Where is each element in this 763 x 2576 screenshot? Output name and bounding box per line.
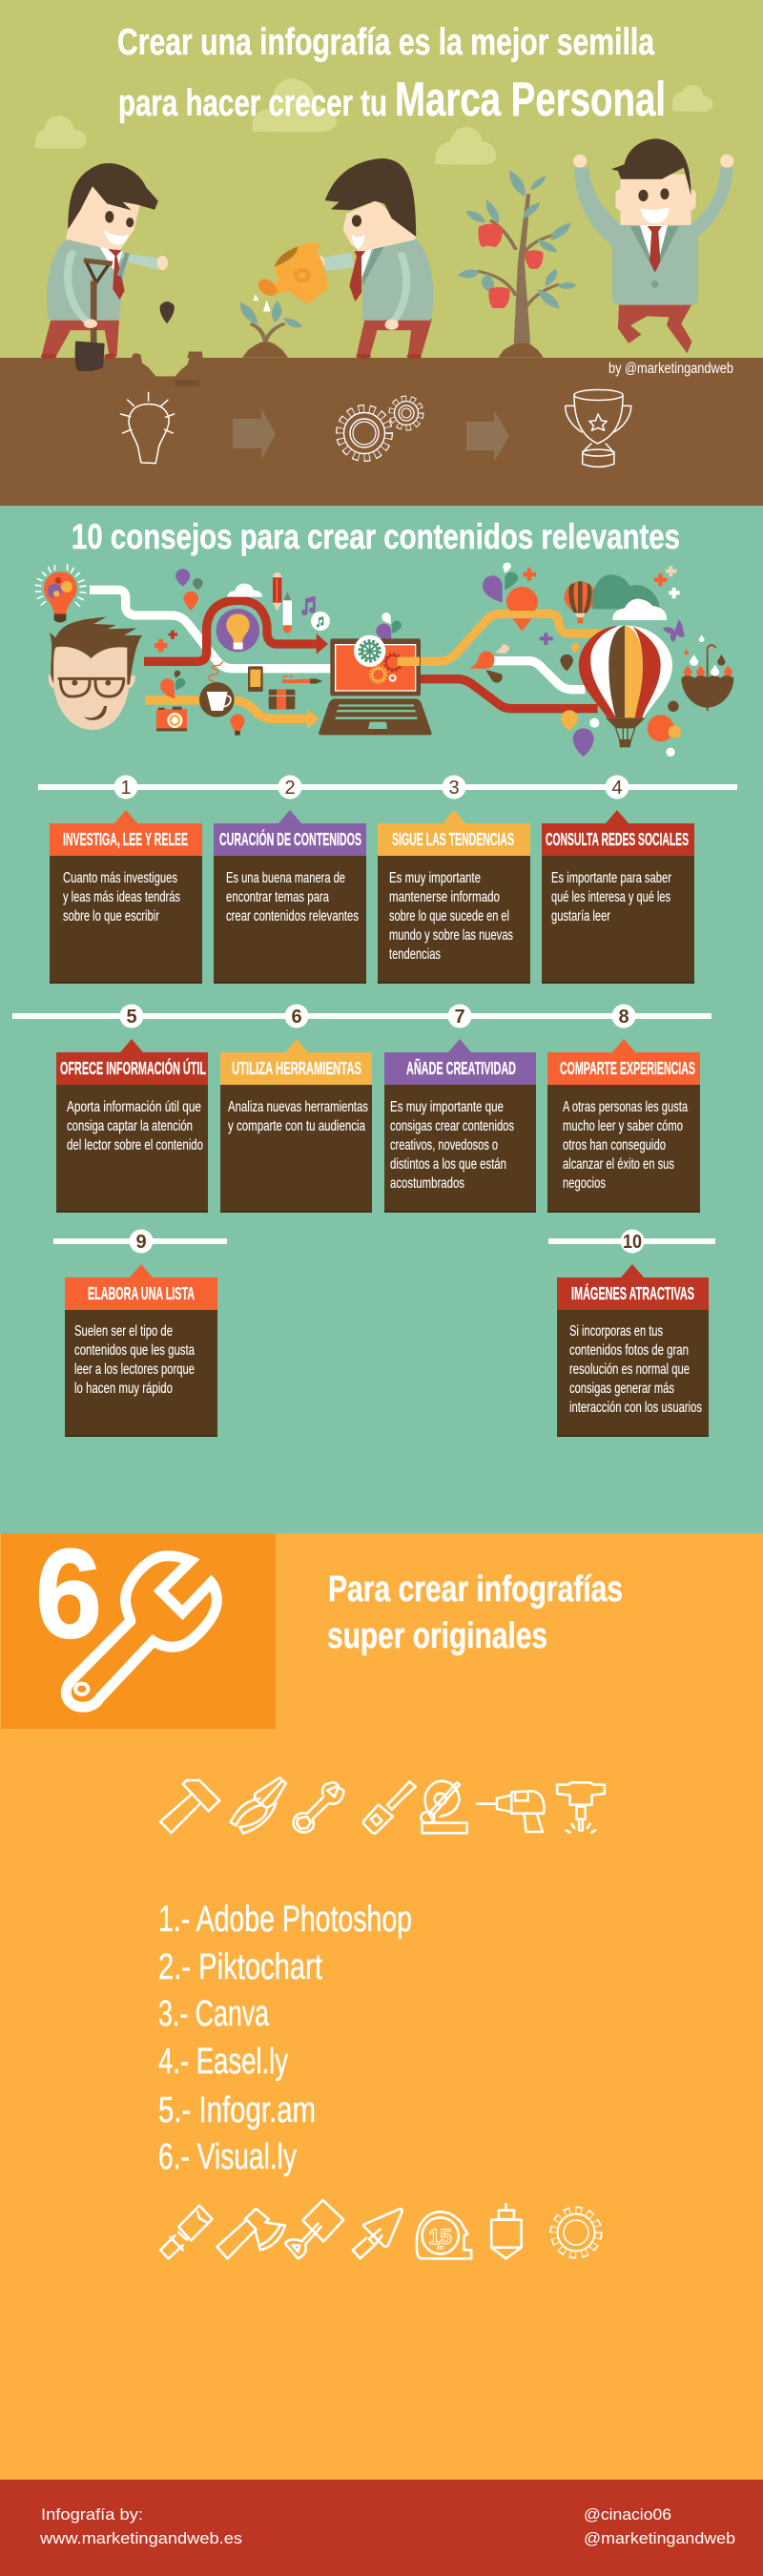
card 3: Es muy importante bbox=[389, 870, 481, 886]
card 8: negocios bbox=[563, 1175, 606, 1192]
card 8: alcanzar el éxito en sus bbox=[563, 1156, 674, 1173]
card 4: Es importante para saber bbox=[551, 870, 671, 886]
card 1: INVESTIGA, LEE Y RELEE bbox=[63, 829, 188, 849]
timeline 10: 10 bbox=[623, 1232, 642, 1253]
title: Marca Personal bbox=[395, 73, 666, 126]
card 9: Suelen ser el tipo de bbox=[74, 1323, 173, 1340]
tape measure digits: 15 bbox=[428, 2225, 452, 2249]
crosses bbox=[523, 566, 680, 645]
tools list: 6.- Visual.ly bbox=[158, 2137, 297, 2177]
footer handles: @cinacio06 bbox=[584, 2505, 671, 2524]
timeline 5-8: 6 bbox=[291, 1007, 302, 1028]
card 10: resolución es normal que bbox=[569, 1361, 690, 1378]
tools list: 5.- Infogr.am bbox=[158, 2090, 316, 2130]
card 2: CURACIÓN DE CONTENIDOS bbox=[219, 829, 361, 849]
arrow bbox=[233, 408, 276, 460]
byline: by @marketingandweb bbox=[608, 361, 733, 377]
card 7: AÑADE CREATIVIDAD bbox=[406, 1058, 516, 1078]
crosses bbox=[155, 639, 167, 652]
card 6: Analiza nuevas herramientas bbox=[228, 1099, 368, 1115]
card 10: interacción con los usuarios bbox=[569, 1400, 702, 1416]
icon: wrench bbox=[294, 1782, 343, 1832]
character head with glasses bbox=[49, 617, 142, 730]
seed bbox=[160, 301, 175, 323]
card 2 bbox=[214, 810, 366, 984]
heading: para crear infografias bbox=[327, 1569, 623, 1656]
apple tree bbox=[458, 170, 577, 358]
middle tools bbox=[248, 572, 509, 735]
card 6 bbox=[220, 1039, 372, 1213]
card 2: Es una buena manera de bbox=[226, 870, 345, 886]
timeline 1-4: 3 bbox=[448, 778, 460, 799]
card 9: contenidos que les gusta bbox=[74, 1342, 195, 1359]
panel: orange tools section bbox=[0, 1533, 763, 2480]
icon: hammer bbox=[160, 1780, 219, 1833]
timeline 5-8: 7 bbox=[454, 1007, 465, 1028]
green cloud bbox=[592, 574, 660, 609]
icon: small bulb bbox=[230, 714, 245, 736]
icon: pliers bbox=[231, 1777, 286, 1834]
timeline 5-8 bbox=[12, 1004, 711, 1028]
panel: ground bbox=[0, 358, 763, 506]
card 3: SIGUE LAS TENDENCIAS bbox=[392, 829, 514, 849]
card 4 bbox=[542, 810, 694, 984]
icon: gear bbox=[554, 2211, 598, 2254]
umbrella bbox=[681, 634, 733, 711]
footer credit: www.marketingandweb.es bbox=[39, 2529, 242, 2547]
panel: footer bbox=[0, 2480, 763, 2576]
card 5 bbox=[56, 1039, 208, 1213]
icon: tape measure bbox=[417, 2212, 471, 2258]
butterfly bbox=[663, 619, 685, 642]
teardrops over laptop bbox=[376, 613, 402, 642]
card 4: gustaría leer bbox=[551, 908, 610, 924]
timeline 5-8: 5 bbox=[126, 1007, 137, 1028]
timeline 9: 9 bbox=[135, 1232, 147, 1253]
icon: circular saw bbox=[423, 1781, 467, 1833]
tape measure digits: m bbox=[437, 2243, 443, 2252]
icon: phone bbox=[248, 666, 263, 692]
heading: para crear infografias: super originales bbox=[327, 1616, 547, 1656]
person jumping bbox=[573, 138, 733, 353]
card 6: y comparte con tu audiencia bbox=[228, 1118, 365, 1134]
card 7: acostumbrados bbox=[390, 1175, 464, 1192]
card 7: consigas crear contenidos bbox=[390, 1118, 514, 1134]
icon: white pencil bbox=[283, 592, 292, 633]
hot air balloon bbox=[579, 626, 672, 747]
white cloud bbox=[612, 599, 667, 620]
icon: red pencil bbox=[273, 572, 281, 612]
heading: para crear infografias: Para crear infografías bbox=[328, 1569, 623, 1610]
icon: pen bbox=[281, 675, 322, 684]
card 8: A otras personas les gusta bbox=[563, 1099, 688, 1115]
icon: saw pivot bbox=[421, 1812, 434, 1823]
card 7: Es muy importante que bbox=[390, 1099, 504, 1115]
card 2: encontrar temas para bbox=[226, 889, 329, 905]
card 9: leer a los lectores porque bbox=[74, 1361, 195, 1378]
icon: purple bulb bbox=[217, 609, 259, 652]
footer credit bbox=[39, 2505, 242, 2547]
card 10: Si incorporas en tus bbox=[569, 1323, 663, 1340]
card 8: mucho leer y saber cómo bbox=[563, 1118, 683, 1134]
card 1: Cuanto más investigues bbox=[63, 870, 177, 886]
panel: header sky bbox=[0, 0, 763, 358]
card 2: crear contenidos relevantes bbox=[226, 908, 359, 924]
tools list: 3.- Canva bbox=[158, 1994, 270, 2034]
icon: music note bbox=[301, 596, 316, 615]
person with watering can and sprout bbox=[240, 158, 434, 359]
clouds bbox=[35, 78, 712, 165]
tools list: 2.- Piktochart bbox=[158, 1947, 322, 1987]
card 5: del lector sobre el contenido bbox=[67, 1137, 203, 1153]
card 4: qué les interesa y qué les bbox=[551, 889, 670, 905]
icon: drill bbox=[477, 1791, 544, 1832]
card 9: ELABORA UNA LISTA bbox=[88, 1283, 195, 1303]
watering can bbox=[275, 242, 327, 304]
teardrops bbox=[483, 563, 538, 632]
icon: shovel bbox=[285, 2200, 343, 2258]
card 3: mundo y sobre las nuevas bbox=[389, 927, 513, 944]
tool icons row 2 bbox=[160, 2200, 522, 2258]
icon: gears bbox=[340, 399, 421, 457]
icon: axe bbox=[217, 2209, 285, 2258]
card 5: consiga captar la atención bbox=[67, 1118, 193, 1134]
teardrops right of screen bbox=[469, 644, 509, 683]
tools list bbox=[158, 1900, 412, 2177]
title: para hacer crecer tu bbox=[118, 83, 387, 124]
timeline 1-4: 1 bbox=[120, 778, 132, 799]
right decorations bbox=[483, 563, 733, 757]
icon: jackhammer bbox=[557, 1782, 605, 1833]
arrow bbox=[466, 410, 509, 462]
card 9 bbox=[65, 1264, 217, 1437]
icon: trophy bbox=[566, 389, 631, 467]
ribbons bbox=[90, 590, 604, 718]
card 1 bbox=[50, 810, 202, 984]
arrowheads bbox=[317, 634, 328, 654]
gears on screen bbox=[354, 635, 385, 667]
icon: box bbox=[269, 690, 295, 709]
card 7: creativos, novedosos o bbox=[390, 1137, 498, 1153]
ground hole bbox=[132, 352, 203, 386]
footer handles: @marketingandweb bbox=[584, 2529, 735, 2547]
timeline 1-4 bbox=[38, 775, 737, 800]
number six block with wrench bbox=[1, 1524, 276, 1729]
icon: screwdriver bbox=[363, 1781, 416, 1833]
card 8: otros han conseguido bbox=[563, 1137, 666, 1153]
tool icons row 1 bbox=[160, 1777, 605, 1834]
icon: tape dial bbox=[423, 2217, 459, 2254]
card 3: mantenerse informado bbox=[389, 889, 500, 905]
footer credit: Infografía by: bbox=[41, 2505, 143, 2524]
title bbox=[117, 22, 666, 126]
icon: light bulb bbox=[121, 393, 175, 464]
timeline 10 bbox=[548, 1229, 715, 1254]
card 3: sobre lo que sucede en el bbox=[389, 908, 509, 924]
icon: camera bbox=[156, 707, 187, 731]
icon: paint scraper bbox=[160, 2206, 212, 2258]
timeline 1-4: 2 bbox=[284, 778, 296, 799]
icon: coffee bbox=[199, 661, 235, 717]
card 8 bbox=[547, 1039, 700, 1213]
timeline 1-4: 4 bbox=[611, 778, 623, 799]
small drops bbox=[560, 643, 594, 757]
yellow ribbon over screen bbox=[398, 648, 420, 675]
card 3 bbox=[378, 810, 530, 984]
footer handles bbox=[584, 2505, 735, 2547]
cloud bbox=[227, 584, 262, 597]
dots bbox=[589, 701, 681, 757]
card 10 bbox=[557, 1264, 709, 1437]
tools list: 1.- Adobe Photoshop bbox=[158, 1900, 412, 1940]
card 3: tendencias bbox=[389, 946, 441, 963]
timeline 9 bbox=[53, 1229, 227, 1254]
icon: trowel bbox=[353, 2209, 402, 2258]
card 10: consigas generar más bbox=[569, 1381, 674, 1397]
card 7 bbox=[384, 1039, 536, 1213]
card 1: sobre lo que escribir bbox=[63, 908, 159, 924]
icon: music bubble bbox=[311, 612, 330, 631]
small balloon bbox=[565, 581, 596, 623]
teardrops bbox=[160, 569, 203, 699]
icon: idea bulb bbox=[35, 565, 86, 622]
card 10: contenidos fotos de gran bbox=[569, 1342, 689, 1359]
card 9: lo hacen muy rápido bbox=[74, 1381, 173, 1397]
card 1: y leas más ideas tendrás bbox=[63, 889, 180, 905]
illustration: content creation flow bbox=[35, 563, 733, 757]
cross bbox=[169, 631, 177, 639]
card 5: Aporta información útil que bbox=[67, 1099, 201, 1115]
panel: teal tips section bbox=[0, 506, 763, 1533]
timeline 5-8: 8 bbox=[618, 1007, 629, 1028]
person with shovel bbox=[41, 163, 175, 371]
card 5: OFRECE INFORMACIÓN ÚTIL bbox=[60, 1058, 206, 1078]
laptop bbox=[319, 635, 432, 735]
card 6: UTILIZA HERRAMIENTAS bbox=[232, 1058, 361, 1078]
icon: plumb bob bbox=[491, 2204, 522, 2258]
icon: wrench bbox=[66, 1556, 217, 1707]
tools list: 4.- Easel.ly bbox=[158, 2042, 288, 2082]
number six block with wrench: 6 bbox=[35, 1524, 102, 1665]
card 7: distintos a los que están bbox=[390, 1156, 506, 1173]
